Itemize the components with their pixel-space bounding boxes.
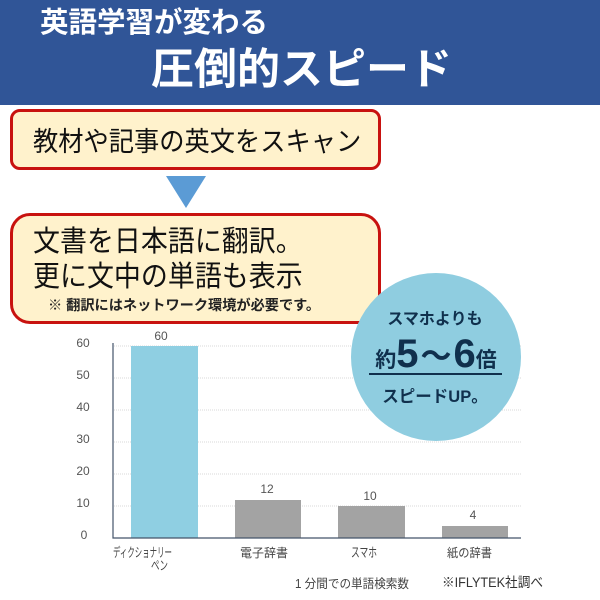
heading: subtitle: 英語学習が変わる [40,7,268,39]
bar chart: ディクショナリー [113,545,172,560]
panel: step 1 scan [10,109,381,170]
bar chart: 60 [154,329,168,343]
bar chart: ※IFLYTEK社調べ [442,575,543,590]
bar chart: 40 [76,400,90,414]
bar chart: 4 [470,508,477,522]
text: network note: ※ 翻訳にはネットワーク環境が必要です。 [48,298,320,314]
bar chart: ペン [151,558,168,573]
bar chart: 30 [76,432,90,446]
divider line [369,373,502,375]
panel: header banner [0,0,600,105]
bar chart: 50 [76,368,90,382]
bar chart: 1 分間での単語検索数 [295,576,409,591]
bar chart: スマホ [351,545,377,560]
bar chart: 12 [260,482,274,496]
text: speed up: スピードUP。 [382,388,488,406]
bar chart: 0 [81,528,88,542]
text: step 2 line 1: 文書を日本語に翻訳。 [33,226,303,258]
bar chart: 10 [76,496,90,510]
bar chart: 20 [76,464,90,478]
bar chart: 10 [363,489,377,503]
bar chart: 60 [76,336,90,350]
text: compared with smartphone: スマホよりも [387,311,483,328]
callout: speed circle [351,273,521,441]
text: step 2 line 2: 更に文中の単語も表示 [33,261,303,293]
bar chart: 紙の辞書 [447,546,492,560]
text: 5 to 6 times: 約5〜6倍 [375,332,497,376]
bar chart: 電子辞書 [240,546,288,560]
panel: step 2 translate [10,213,381,324]
title: 圧倒的スピード [151,46,452,94]
text: step 1: 教材や記事の英文をスキャン [33,127,361,157]
